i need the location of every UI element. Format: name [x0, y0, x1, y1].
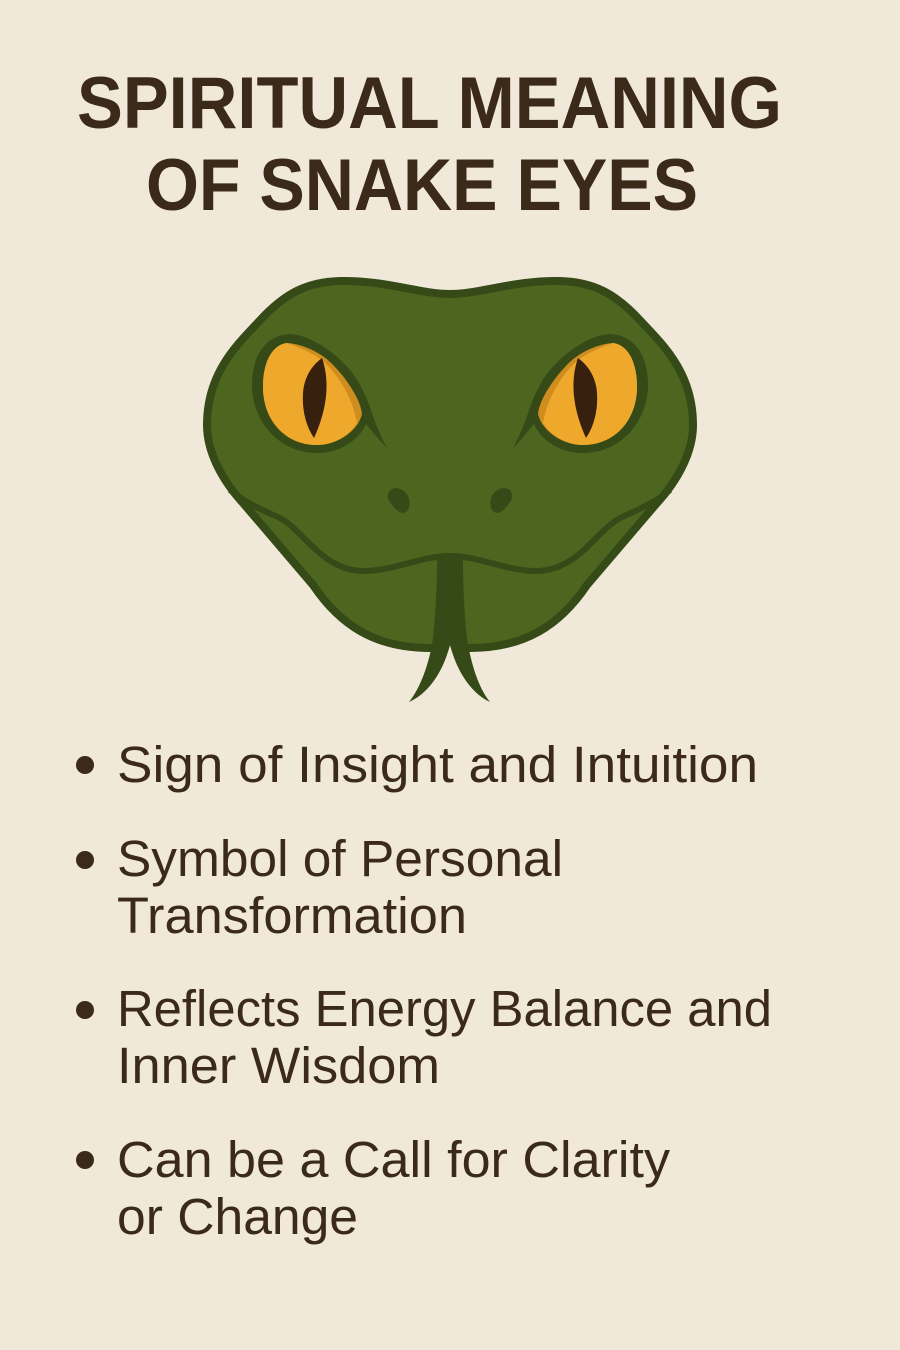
list item: transformation: Symbol of Personal	[117, 830, 563, 887]
forked tongue	[409, 558, 490, 702]
title: SPIRITUAL MEANING	[77, 63, 782, 144]
list item: transformation	[76, 830, 563, 944]
title: OF SNAKE EYES	[146, 145, 698, 226]
list item: insight: Sign of Insight and Intuition	[117, 736, 758, 793]
list item: energy balance	[76, 980, 772, 1094]
list item: clarity: or Change	[117, 1188, 358, 1245]
left eye	[252, 334, 387, 453]
list item: transformation: Transformation	[117, 887, 467, 944]
tongue notch gap	[405, 645, 495, 704]
right eye	[513, 334, 648, 453]
left nostril	[388, 488, 410, 513]
list item: energy balance: Reflects Energy Balance and	[117, 980, 772, 1037]
title	[77, 63, 782, 226]
mouth line	[230, 490, 670, 571]
snake head shape	[207, 281, 693, 648]
list item: energy balance: Inner Wisdom	[117, 1037, 440, 1094]
list item: clarity	[76, 1131, 670, 1245]
right nostril	[490, 488, 512, 513]
list item: clarity: Can be a Call for Clarity	[117, 1131, 670, 1188]
illustration: snake head	[207, 281, 693, 704]
